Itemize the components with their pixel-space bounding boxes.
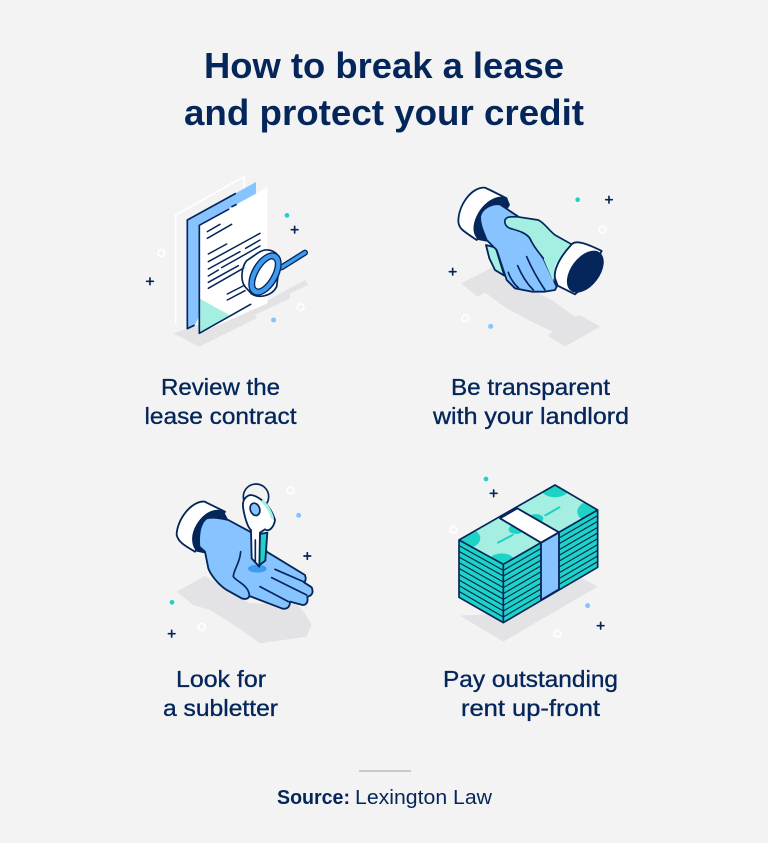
title: How to break a lease — [204, 45, 564, 86]
label: look for a subletter: a subletter — [163, 695, 278, 721]
label: review the lease contract — [144, 374, 297, 429]
label: pay outstanding rent up-front — [443, 666, 618, 721]
source line: Source: — [277, 787, 350, 809]
icon: hand holding key — [168, 484, 313, 643]
label: be transparent with your landlord: with your landlord — [432, 403, 629, 429]
label: review the lease contract: lease contract — [144, 403, 297, 429]
label: pay outstanding rent up-front: rent up-front — [461, 695, 601, 721]
label: be transparent with your landlord — [432, 374, 629, 429]
title — [184, 45, 584, 133]
icon: stack of money — [450, 476, 604, 642]
icon: document and magnifying glass — [147, 177, 308, 347]
label: be transparent with your landlord: Be transparent — [451, 374, 611, 400]
label: review the lease contract: Review the — [161, 374, 280, 400]
label: look for a subletter — [163, 666, 278, 721]
source line — [277, 787, 493, 809]
label: look for a subletter: Look for — [176, 666, 266, 692]
label: pay outstanding rent up-front: Pay outstanding — [443, 666, 618, 692]
source line: Lexington Law — [355, 787, 493, 809]
icon: handshake — [449, 188, 612, 347]
title: and protect your credit — [184, 92, 584, 133]
